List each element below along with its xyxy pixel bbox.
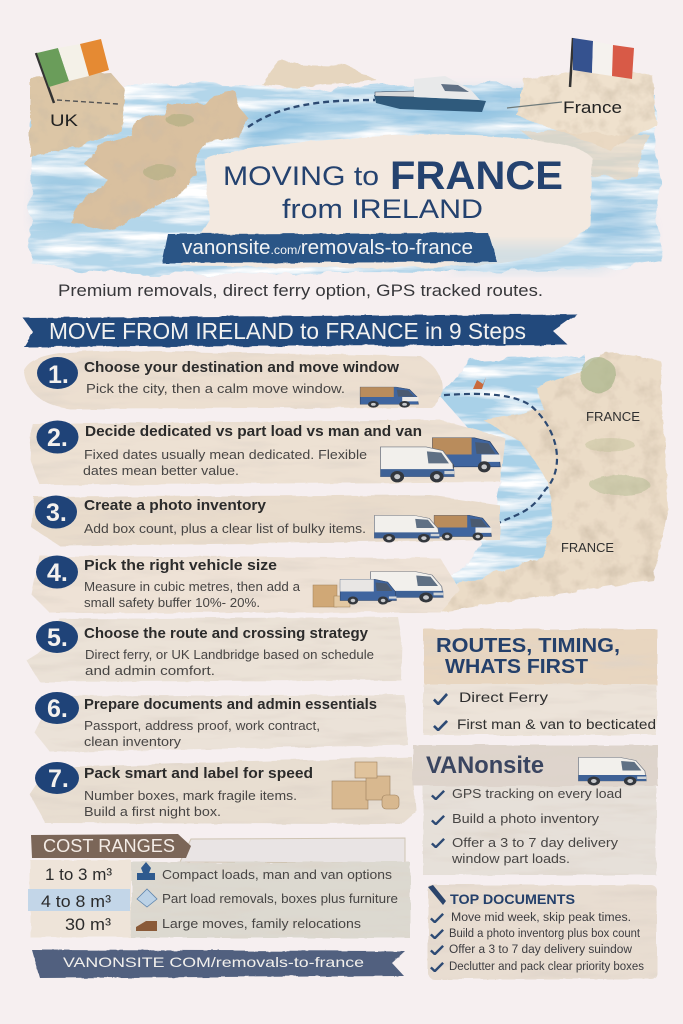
panel: top documents: Offer a 3 to 7 day delivery suindow: [449, 944, 633, 956]
footer banner: [32, 950, 405, 978]
label: France: France: [563, 98, 622, 117]
step 2: Decide dedicated vs part load vs man and van: [85, 423, 422, 440]
highlighted row: [28, 889, 130, 911]
step 5: and admin comfort.: [85, 663, 215, 678]
panel: routes: Direct Ferry: [459, 689, 548, 705]
steps map: France coast: [424, 352, 668, 612]
flag: Ireland: [36, 39, 109, 103]
row: 1 to 3: Compact loads, man and van options: [162, 867, 393, 882]
panel: routes: [423, 629, 657, 735]
step 4: Pick the right vehicle size: [84, 557, 277, 574]
tagline: Premium removals, direct ferry option, GPS tracked routes.: [58, 281, 543, 300]
step 5: Direct ferry, or UK Landbridge based on schedule: [85, 647, 374, 662]
url banner: [162, 233, 497, 263]
icon: boxes: [313, 585, 350, 607]
label: UK: UK: [50, 111, 79, 130]
Ireland: [70, 91, 248, 231]
cost right column: [131, 862, 410, 938]
icon: boxes: [332, 762, 399, 809]
ship: [374, 76, 486, 112]
row: 1 to 3: [45, 862, 393, 884]
panel: routes: First man & van to becticated: [457, 716, 656, 732]
UK land: [30, 72, 126, 157]
panel: top documents: Build a photo inventorg plus box count: [449, 928, 641, 940]
cost ranges: [28, 834, 410, 938]
step 6: Prepare documents and admin essentials: [84, 696, 377, 713]
step 7: 7.: [48, 765, 69, 793]
step 5: [26, 617, 402, 682]
panel: VANonsite: [413, 745, 658, 875]
steps ribbon: MOVE FROM IRELAND to FRANCE in 9 Steps: [49, 318, 526, 344]
panel: VANonsite: Build a photo inventory: [452, 811, 600, 826]
step 7: Build a first night box.: [84, 804, 221, 819]
step 2: Fixed dates usually mean dedicated. Flexible: [84, 447, 367, 462]
row: 4 to 8: Part load removals, boxes plus furniture: [162, 891, 398, 906]
cost left column: [30, 860, 131, 937]
panel: top documents: [428, 885, 657, 979]
step 4: Measure in cubic metres, then add a: [84, 579, 301, 594]
ferry route: [57, 100, 562, 127]
step 1: 1.: [48, 361, 69, 389]
row: 30: 30 m³: [65, 916, 112, 934]
step 6: clean inventory: [84, 734, 182, 749]
step 3: [32, 495, 500, 546]
panel: top documents: Move mid week, skip peak times.: [451, 912, 631, 924]
icon: marker: [473, 377, 486, 389]
step 3: 3.: [46, 499, 67, 527]
url banner: vanonsite.com/removals-to-france: [182, 237, 473, 259]
dashed route: [424, 394, 557, 525]
hero map: [30, 38, 660, 274]
step 1: [24, 351, 443, 409]
panel: VANonsite: VANonsite: [426, 752, 544, 779]
panel: top documents: TOP DOCUMENTS: [450, 891, 575, 907]
step 4: 4.: [47, 559, 68, 587]
step 5: 5.: [47, 624, 68, 652]
row: 1 to 3: 1 to 3 m³: [45, 866, 113, 884]
label: FRANCE south: FRANCE: [561, 540, 614, 555]
cost ranges: COST RANGES: [43, 836, 175, 856]
cost header: [31, 834, 191, 858]
step 5: Choose the route and crossing strategy: [84, 625, 369, 642]
top land wisp: [262, 62, 375, 88]
panel: routes: WHATS FIRST: [445, 656, 588, 678]
step 3: Add box count, plus a clear list of bulky items.: [84, 521, 366, 536]
step 7: Number boxes, mark fragile items.: [84, 788, 297, 803]
step 6: 6.: [47, 695, 68, 723]
cost strip: [180, 838, 405, 863]
row: 30: Large moves, family relocations: [162, 916, 362, 931]
panel: VANonsite: window part loads.: [451, 851, 570, 866]
step 2: 2.: [47, 424, 68, 452]
panel: VANonsite: Offer a 3 to 7 day delivery: [452, 835, 619, 850]
step 7: [30, 757, 416, 824]
step 3: Create a photo inventory: [84, 497, 267, 514]
step 4: small safety buffer 10%- 20%.: [84, 595, 260, 610]
title: [223, 154, 563, 224]
panel: routes: ROUTES, TIMING,: [436, 635, 620, 657]
step 1: Pick the city, then a calm move window.: [86, 381, 345, 396]
sea: [30, 82, 660, 274]
step 6: [34, 692, 408, 752]
step 2: dates mean better value.: [83, 463, 239, 478]
row: 4 to 8: 4 to 8 m³: [41, 893, 112, 911]
flag: France: [570, 38, 634, 87]
steps ribbon: [23, 314, 577, 347]
panel: VANonsite: GPS tracking on every load: [452, 786, 622, 801]
step 6: Passport, address proof, work contract,: [84, 718, 320, 733]
step 2: [30, 420, 505, 485]
title: FRANCE: [390, 154, 563, 198]
step 7: Pack smart and label for speed: [84, 765, 313, 782]
France land: [516, 66, 656, 150]
title: from IRELAND: [282, 194, 483, 224]
panel: top documents: Declutter and pack clear priority boxes: [449, 961, 644, 973]
title: MOVING to: [223, 161, 379, 191]
step 1: Choose your destination and move window: [84, 359, 399, 376]
label: FRANCE north: FRANCE: [586, 409, 640, 424]
title panel: [180, 134, 592, 268]
step 4: [32, 556, 460, 613]
row: 4 to 8: [41, 889, 398, 911]
row: 30: [65, 916, 362, 934]
footer banner: VANONSITE COM/removals-to-france: [63, 954, 364, 970]
